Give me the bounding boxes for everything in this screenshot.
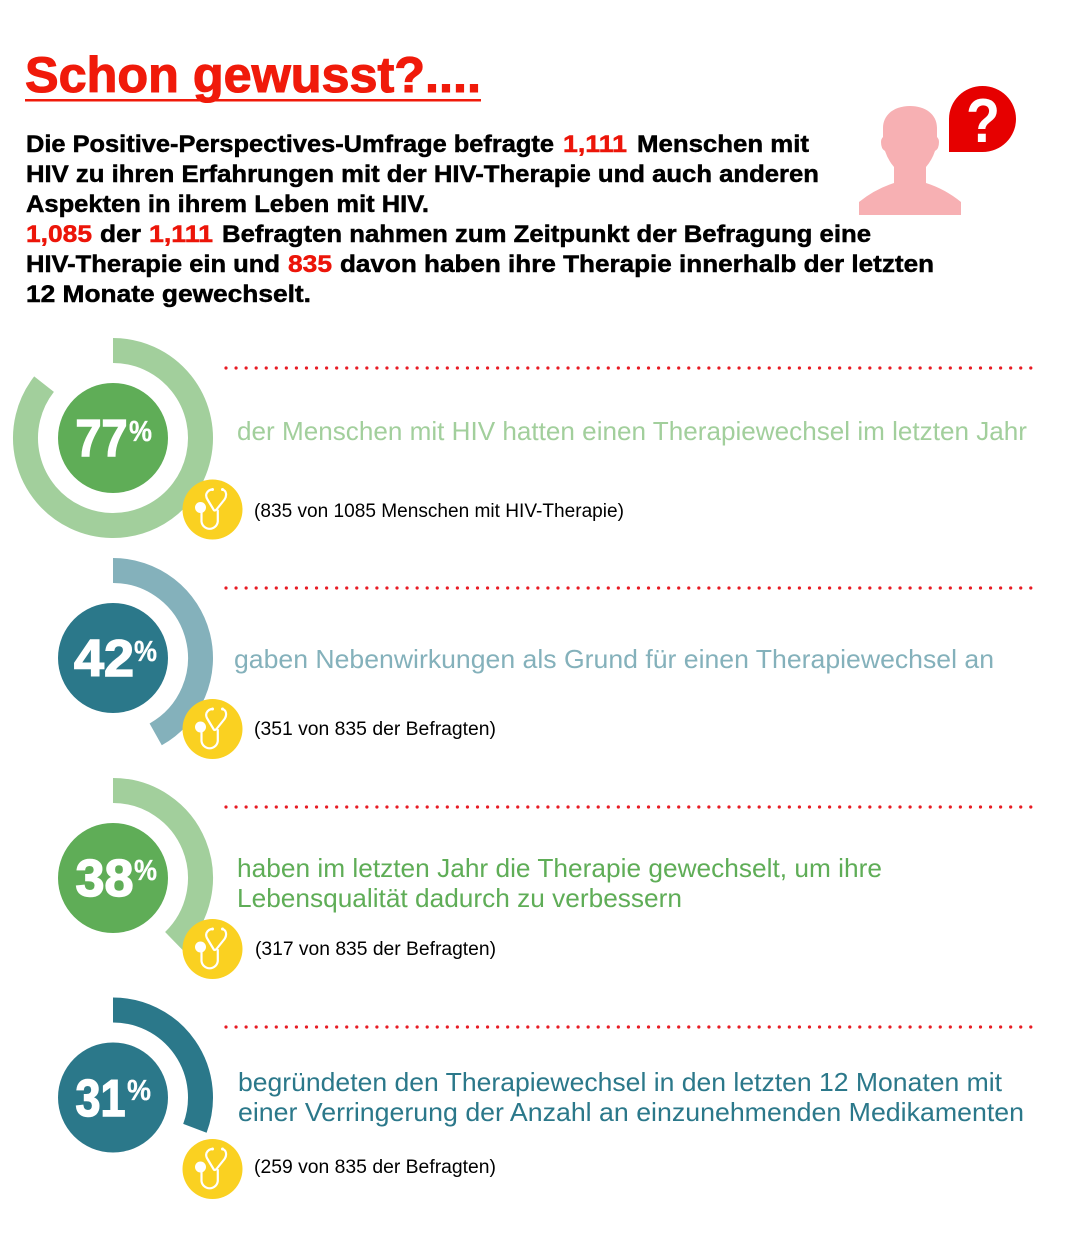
intro text: der xyxy=(100,221,141,248)
icon: person with question bubble xyxy=(859,86,1016,215)
badge 42: 42 xyxy=(74,630,134,688)
badge 42: % xyxy=(134,636,157,668)
badge 77 xyxy=(58,383,168,493)
intro text: HIV-Therapie ein und xyxy=(26,251,280,278)
divider dots xyxy=(226,805,1032,809)
intro text: 835 xyxy=(288,251,332,278)
intro text: 1,085 xyxy=(26,221,92,248)
source 31: (259 von 835 der Befragten) xyxy=(254,1157,496,1178)
divider dots xyxy=(226,1025,1032,1029)
statement 31: einer Verringerung der Anzahl an einzunehmenden Medikamenten xyxy=(238,1097,1024,1127)
badge 31: % xyxy=(127,1075,151,1107)
statement 38: haben im letzten Jahr die Therapie gewechselt, um ihre xyxy=(237,853,882,883)
intro text xyxy=(26,131,934,308)
ring 31 xyxy=(113,1010,201,1128)
intro text: HIV zu ihren Erfahrungen mit der HIV-Therapie und auch anderen xyxy=(26,161,819,188)
badge 31 xyxy=(58,1042,168,1152)
panel: 42 percent xyxy=(58,570,1032,759)
icon: stethoscope xyxy=(182,480,242,540)
intro text: 12 Monate gewechselt. xyxy=(26,281,311,308)
ring 38 xyxy=(113,790,200,941)
intro text: Befragten nahmen zum Zeitpunkt der Befragung eine xyxy=(222,221,871,248)
badge 42 xyxy=(58,603,168,713)
icon: stethoscope xyxy=(182,699,242,759)
panel: 31 percent xyxy=(58,1010,1032,1199)
source 42: (351 von 835 der Befragten) xyxy=(254,719,496,740)
intro text: 1,111 xyxy=(563,131,627,158)
intro text: davon haben ihre Therapie innerhalb der letzten xyxy=(340,251,934,278)
badge 77: % xyxy=(129,416,152,448)
statement 77: der Menschen mit HIV hatten einen Therapiewechsel im letzten Jahr xyxy=(237,416,1027,446)
icon: stethoscope xyxy=(182,1139,242,1199)
statement 31: begründeten den Therapiewechsel in den letzten 12 Monaten mit xyxy=(238,1067,1003,1097)
divider dots xyxy=(226,366,1032,370)
badge 38: % xyxy=(134,855,157,887)
intro text: Aspekten in ihrem Leben mit HIV. xyxy=(26,191,429,218)
badge 38 xyxy=(58,823,168,933)
panel: 38 percent xyxy=(58,790,1032,979)
statement 38 xyxy=(237,853,882,913)
intro text: Die Positive-Perspectives-Umfrage befragte xyxy=(26,131,554,158)
badge 31: 31 xyxy=(76,1070,126,1128)
source 38: (317 von 835 der Befragten) xyxy=(255,939,496,960)
icon: person with question bubble: ? xyxy=(966,87,1000,156)
badge 77: 77 xyxy=(76,410,128,468)
statement 31 xyxy=(238,1067,1024,1127)
ring 77 xyxy=(26,350,201,526)
statement 38: Lebensqualität dadurch zu verbessern xyxy=(237,883,682,913)
intro text: Menschen mit xyxy=(637,131,809,158)
divider dots xyxy=(226,586,1032,590)
statement 42: gaben Nebenwirkungen als Grund für einen Therapiewechsel an xyxy=(234,644,994,674)
badge 38: 38 xyxy=(76,850,134,908)
source 77: (835 von 1085 Menschen mit HIV-Therapie) xyxy=(254,501,624,522)
panel: 77 percent xyxy=(26,350,1032,540)
title: Schon gewusst?.... xyxy=(25,47,481,103)
ring 42 xyxy=(113,570,201,734)
icon: stethoscope xyxy=(182,919,242,979)
intro text: 1,111 xyxy=(149,221,213,248)
